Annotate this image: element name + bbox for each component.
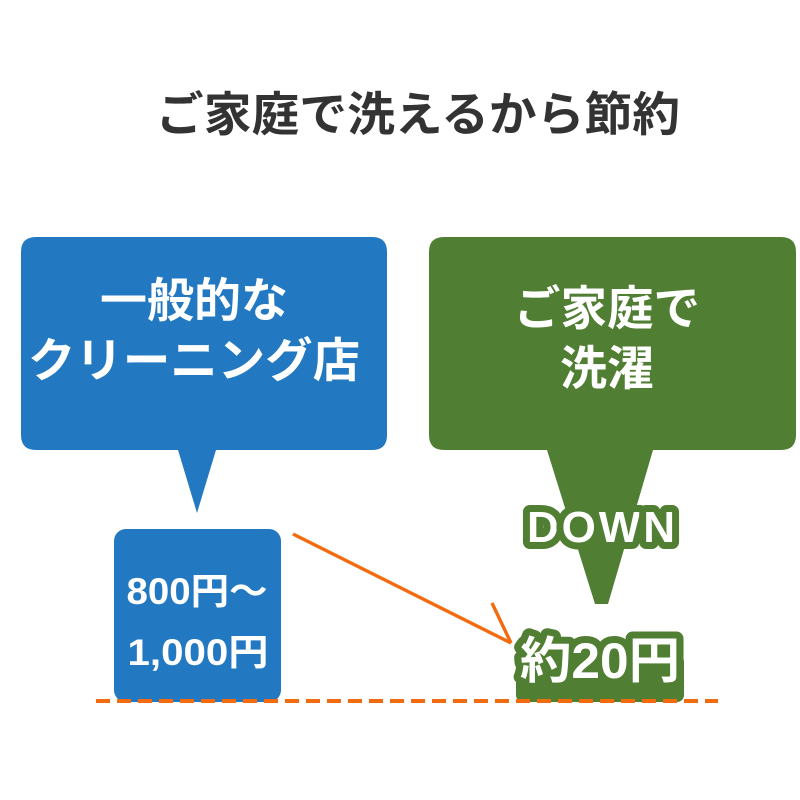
arrow: price reduction (293, 534, 511, 643)
bar: cleaning shop price (114, 529, 281, 702)
panel: cleaning shop speech bubble (21, 237, 387, 513)
label: DOWN: DOWN (527, 503, 675, 552)
price label: 800 to 1,000 yen: 800円～ (126, 571, 268, 612)
home washing label (514, 282, 700, 395)
cleaning shop label: クリーニング店 (28, 334, 360, 387)
baseline dashed line (96, 699, 718, 703)
home washing label: ご家庭で (514, 282, 700, 335)
cleaning shop label: 一般的な (100, 274, 288, 327)
price label: about 20 yen: 約20円 (520, 633, 680, 689)
price label: 800 to 1,000 yen (126, 571, 268, 673)
title: ご家庭で洗えるから節約 (156, 88, 680, 141)
cleaning shop label (28, 274, 360, 387)
home washing label: 洗濯 (560, 342, 654, 395)
bar: home washing price (516, 655, 684, 702)
panel: home washing speech bubble (429, 237, 796, 604)
price label: 800 to 1,000 yen: 1,000円 (128, 632, 268, 673)
